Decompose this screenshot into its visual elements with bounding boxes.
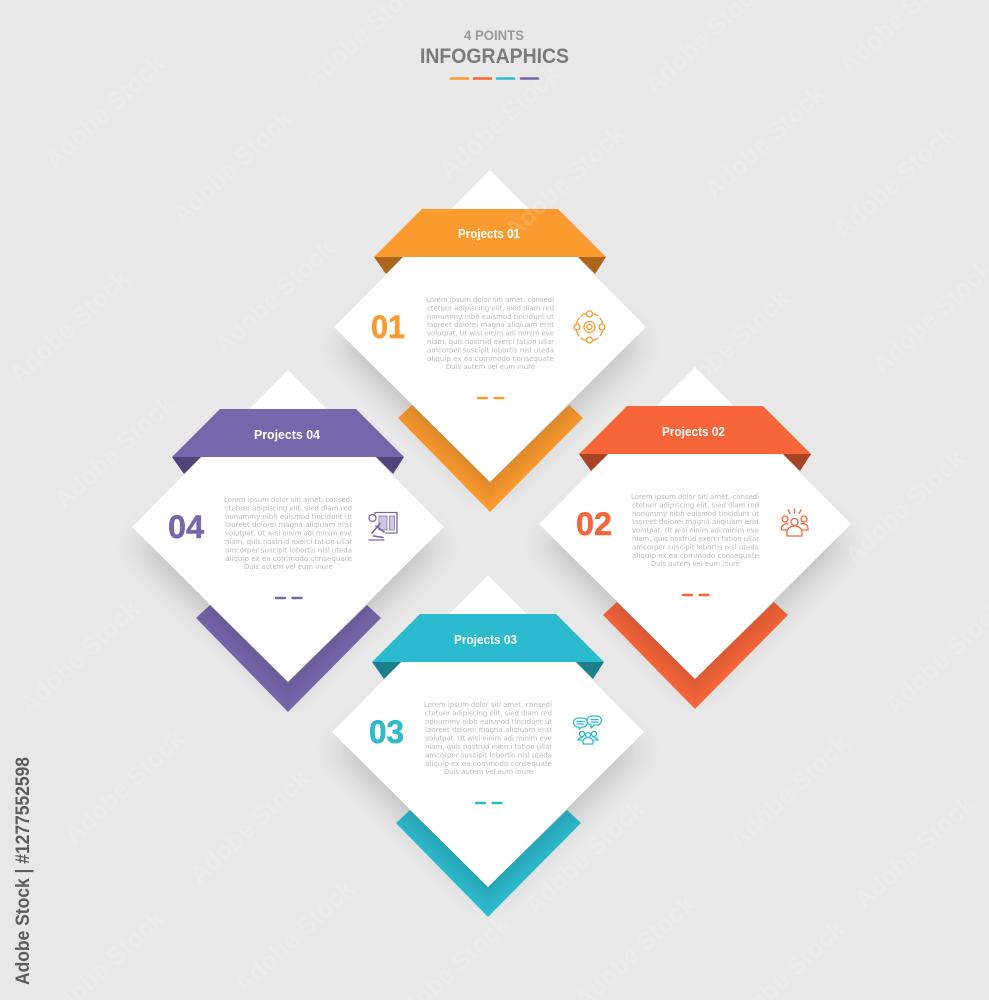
panel: project 04: [132, 370, 444, 712]
watermark: Adobe Stock repeated: Adobe Stock: [209, 235, 340, 359]
watermark: Adobe Stock repeated: Adobe Stock: [434, 60, 565, 184]
text block: Lorem ipsum dolor siti amet, consedi: [224, 495, 352, 504]
text block: amcorper suscipit lobortis nisl uteda: [632, 542, 759, 551]
icon: gavel and document: [369, 512, 397, 540]
heading: Projects 02: [662, 425, 725, 439]
text block: ctetuer adipiscing elit, sied diam red: [632, 500, 759, 509]
watermark: Adobe Stock repeated: Adobe Stock: [519, 795, 650, 919]
watermark: Adobe Stock repeated: Adobe Stock: [724, 730, 855, 854]
text block: amcorper suscipit lobortis nisl uteda: [425, 750, 552, 759]
ribbon: Projects 01: [374, 209, 606, 257]
text block: laoreet dolorei magna aliqiuam erat: [425, 725, 552, 734]
watermark: Adobe Stock repeated: Adobe Stock: [664, 285, 795, 409]
text block: aliquip ex ea commodo consequate: [632, 551, 760, 560]
heading: Projects 04: [254, 428, 320, 442]
number: 03: [369, 714, 404, 750]
ribbon: Projects 04: [172, 409, 404, 457]
panel: project 03: [332, 575, 644, 917]
text block: [224, 495, 353, 571]
heading: Projects 03: [454, 633, 517, 647]
watermark: Adobe Stock repeated: Adobe Stock: [4, 265, 135, 389]
text block: [631, 492, 760, 568]
text block: nonummy nibh euismod tincidunt ut: [632, 509, 759, 518]
title: [420, 27, 569, 68]
watermark: Adobe Stock repeated: Adobe Stock: [839, 445, 970, 569]
text block: ctetuer adipiscing elit, sied diam red: [425, 708, 552, 717]
text block: aliquip ex ea commodo consequate: [425, 759, 553, 768]
text block: aliquip ex ea commodo consequate: [225, 554, 353, 563]
dashes: [276, 597, 302, 599]
number: 02: [576, 506, 612, 542]
text block: Lorem ipsum dolor siti amet, consedi: [424, 700, 552, 709]
watermark: Adobe Stock repeated: Adobe Stock: [39, 50, 170, 174]
dashes: [478, 397, 504, 399]
watermark: Adobe Stock repeated: Adobe Stock: [499, 120, 630, 244]
text block: Duis autem vel eum iriure: [444, 767, 534, 776]
watermark: Adobe Stock repeated: Adobe Stock: [229, 875, 360, 999]
text block: niam, quis nostrud exerci tation ullar: [425, 742, 552, 751]
ribbon: Projects 03: [372, 614, 604, 662]
text block: volutpat. Ut wisi einim adi minim eve: [427, 329, 555, 338]
text block: niam, quis nostrud exerci tation ullar: [225, 537, 352, 546]
heading: Projects 01: [458, 227, 520, 241]
ribbon: Projects 02: [579, 406, 811, 454]
number: 04: [168, 509, 204, 545]
text block: niam, quis nostrud exerci tation ullar: [427, 337, 554, 346]
title: 4 POINTS: [464, 27, 524, 43]
watermark: Adobe Stock repeated: Adobe Stock: [167, 105, 298, 229]
icon: team: [782, 509, 808, 536]
text block: [426, 295, 555, 371]
text block: volutpat. Ut wisi einim adi minim eve: [632, 526, 760, 535]
title colour dashes: [451, 77, 538, 80]
text block: aliquip ex ea commodo consequate: [427, 354, 555, 363]
number: 01: [371, 309, 405, 345]
text block: Duis autem vel eum iriure: [244, 562, 334, 571]
text block: [424, 700, 553, 776]
text block: Lorem ipsum dolor siti amet, consedi: [631, 492, 759, 501]
panel: project 02: [539, 367, 851, 709]
panel: project 01: [334, 170, 646, 512]
text block: Lorem ipsum dolor siti amet, consedi: [426, 295, 554, 304]
dashes: [683, 594, 708, 596]
side stock label: Adobe Stock | #1277552598: [13, 757, 34, 985]
watermark: Adobe Stock repeated: Adobe Stock: [699, 80, 830, 204]
watermark: Adobe Stock repeated: Adobe Stock: [184, 765, 315, 889]
text block: volutpat. Ut wisi einim adi minim eve: [425, 734, 553, 743]
watermark: Adobe Stock repeated: Adobe Stock: [829, 120, 960, 244]
watermark: Adobe Stock repeated: Adobe Stock: [49, 390, 180, 514]
text block: amcorper suscipit lobortis nisl uteda: [427, 345, 554, 354]
title: INFOGRAPHICS: [420, 45, 569, 68]
text block: amcorper suscipit lobortis nisl uteda: [225, 545, 352, 554]
text block: nonummy nibh euismod tincidunt ut: [225, 512, 352, 521]
text block: laoreet dolorei magna aliqiuam erat: [427, 320, 554, 329]
text block: Duis autem vel eum iriure: [651, 559, 741, 568]
dashes: [476, 802, 502, 804]
icon: discussion group: [574, 716, 602, 744]
text block: nonummy nibh euismod tincidunt ut: [425, 717, 552, 726]
text block: Duis autem vel eum iriure: [446, 362, 536, 371]
text block: nonummy nibh euismod tincidunt ut: [427, 312, 554, 321]
watermark: Adobe Stock repeated: Adobe Stock: [849, 790, 980, 914]
text block: laoreet dolorei magna aliqiuam erat: [632, 517, 759, 526]
icon: gear network: [574, 311, 605, 343]
watermark: Adobe Stock repeated: Adobe Stock: [59, 725, 190, 849]
text block: ctetuer adipiscing elit, sied diam red: [225, 503, 352, 512]
text block: volutpat. Ut wisi einim adi minim eve: [225, 529, 353, 538]
text block: niam, quis nostrud exerci tation ullar: [632, 534, 759, 543]
text block: laoreet dolorei magna aliqiuam erat: [225, 520, 352, 529]
text block: ctetuer adipiscing elit, sied diam red: [427, 303, 554, 312]
watermark: Adobe Stock repeated: Adobe Stock: [14, 595, 145, 719]
